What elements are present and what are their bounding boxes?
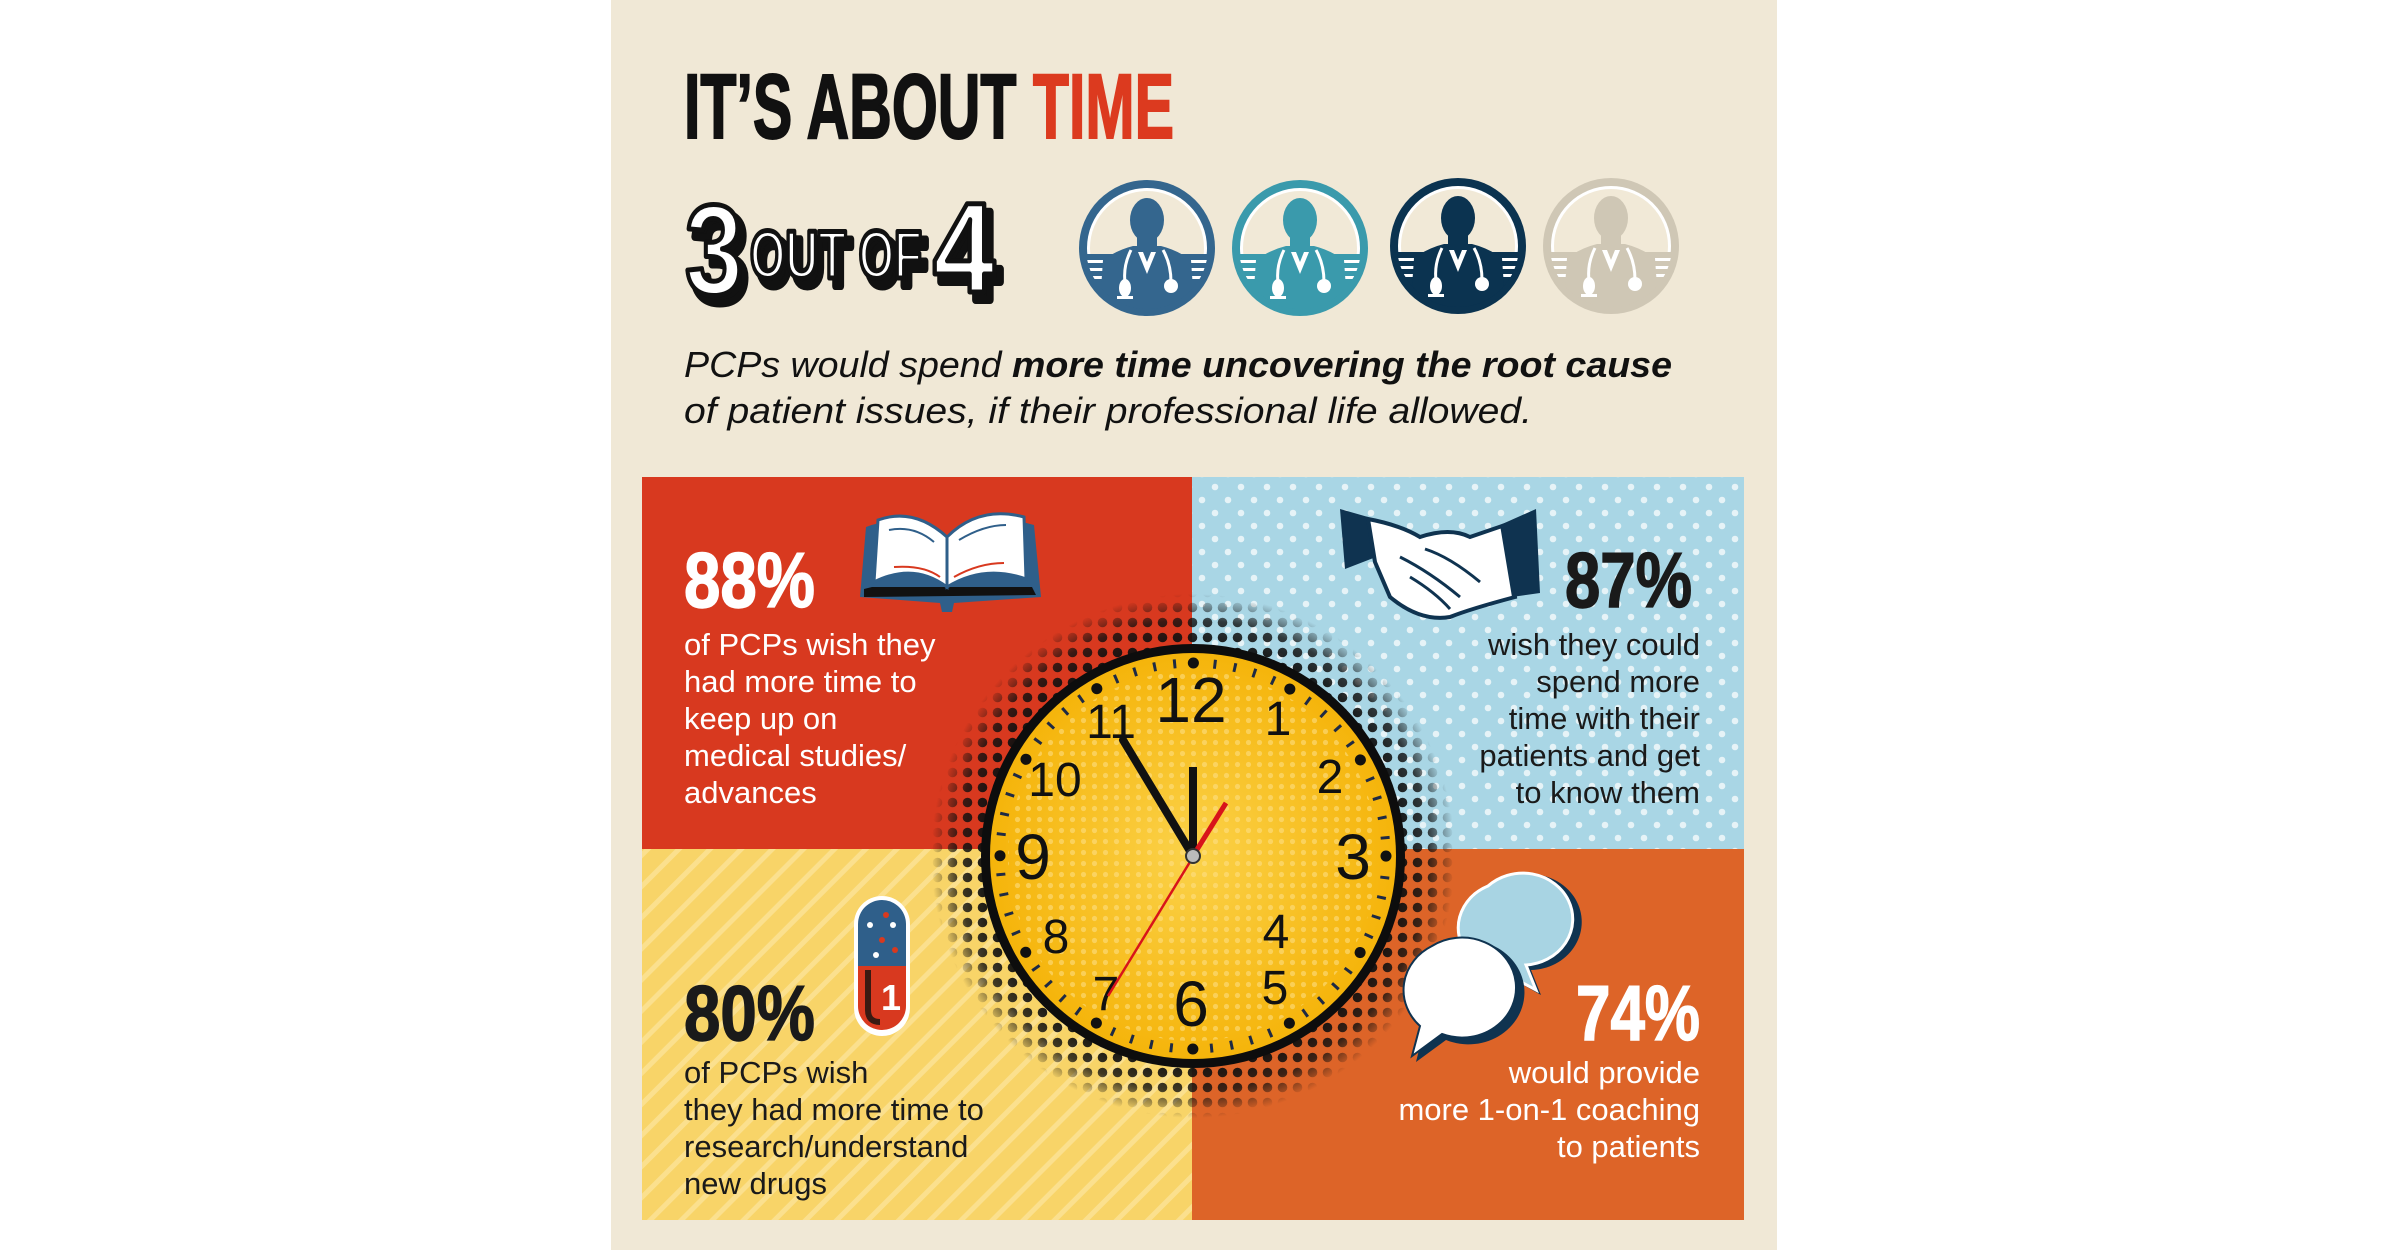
clock: 3 bbox=[1335, 821, 1371, 893]
icon: speech bubbles bbox=[1404, 873, 1582, 1062]
halftone ring bbox=[933, 596, 1452, 1117]
clock hands bbox=[1123, 740, 1193, 856]
stat: 88%: keep up on bbox=[684, 701, 837, 736]
clock: 1 bbox=[1265, 693, 1291, 746]
stat: 87%: 87% bbox=[1565, 536, 1692, 624]
stat: 87%: patients and get bbox=[1479, 738, 1700, 773]
clock: 7 bbox=[1093, 968, 1119, 1021]
panel: blue quadrant bbox=[1192, 477, 1744, 850]
stat: 87%: spend more bbox=[1536, 664, 1700, 699]
subtitle: of patient issues, if their professional life allowed. bbox=[684, 390, 1532, 431]
stat: 87%: time with their bbox=[1509, 701, 1700, 736]
subtitle bbox=[684, 344, 1672, 431]
stat: 88%: of PCPs wish they bbox=[684, 627, 936, 662]
clock: 9 bbox=[1015, 821, 1051, 893]
stat: 74%: more 1-on-1 coaching bbox=[1398, 1092, 1700, 1127]
panel: yellow quadrant bbox=[642, 849, 1193, 1220]
stat: 3 out of 4: 4 bbox=[939, 185, 1001, 328]
stat: 3 out of 4 bbox=[685, 177, 1001, 330]
clock: 5 bbox=[1262, 962, 1288, 1015]
background panel bbox=[611, 0, 1777, 1250]
stat: 80%: they had more time to bbox=[684, 1092, 984, 1127]
icons: doctors bbox=[1077, 178, 1681, 324]
stat: 88%: 88% bbox=[684, 536, 815, 624]
stat: 3 out of 4: 4 bbox=[933, 177, 995, 320]
stat: 3 out of 4: OUT OF bbox=[756, 225, 928, 301]
stat: 80%: of PCPs wish bbox=[684, 1055, 868, 1090]
icon: handshake bbox=[1340, 509, 1540, 618]
stat: 88%: medical studies/ bbox=[684, 738, 907, 773]
stat: 88%: had more time to bbox=[684, 664, 917, 699]
clock: 6 bbox=[1173, 968, 1209, 1040]
clock: 8 bbox=[1043, 911, 1069, 964]
stat: 74%: would provide bbox=[1508, 1055, 1700, 1090]
stat: 80%: research/understand bbox=[684, 1129, 968, 1164]
clock: 2 bbox=[1317, 751, 1343, 804]
clock bbox=[981, 644, 1405, 1068]
stat: 88%: advances bbox=[684, 775, 817, 810]
stat: 87%: wish they could bbox=[1487, 627, 1700, 662]
icon: book bbox=[860, 514, 1041, 612]
title: IT’S ABOUT TIME bbox=[684, 56, 1174, 158]
clock: 12 bbox=[1155, 664, 1227, 736]
icon: pill: 1 bbox=[881, 977, 901, 1018]
stat: 80%: 80% bbox=[684, 969, 815, 1057]
stat: 87%: to know them bbox=[1516, 775, 1700, 810]
stat: 3 out of 4: 3 bbox=[691, 187, 749, 330]
stat: 80%: new drugs bbox=[684, 1166, 827, 1201]
icon: pill bbox=[854, 896, 910, 1036]
stat: 80% bbox=[684, 969, 984, 1201]
stat: 3 out of 4: 3 bbox=[685, 179, 743, 322]
stat: 88% bbox=[684, 536, 936, 810]
clock: 11 bbox=[1086, 696, 1136, 749]
panel: red quadrant bbox=[642, 477, 1193, 850]
stat: 87% bbox=[1479, 536, 1700, 810]
stat: 3 out of 4: OUT OF bbox=[750, 217, 922, 293]
stat: 74%: 74% bbox=[1576, 969, 1700, 1057]
stat: 74%: to patients bbox=[1557, 1129, 1700, 1164]
panel: orange quadrant bbox=[1192, 849, 1744, 1220]
clock: 4 bbox=[1263, 906, 1289, 959]
clock: 10 bbox=[1028, 754, 1082, 807]
stat: 74% bbox=[1398, 969, 1700, 1164]
subtitle: PCPs would spend more time uncovering the root cause bbox=[684, 344, 1672, 385]
